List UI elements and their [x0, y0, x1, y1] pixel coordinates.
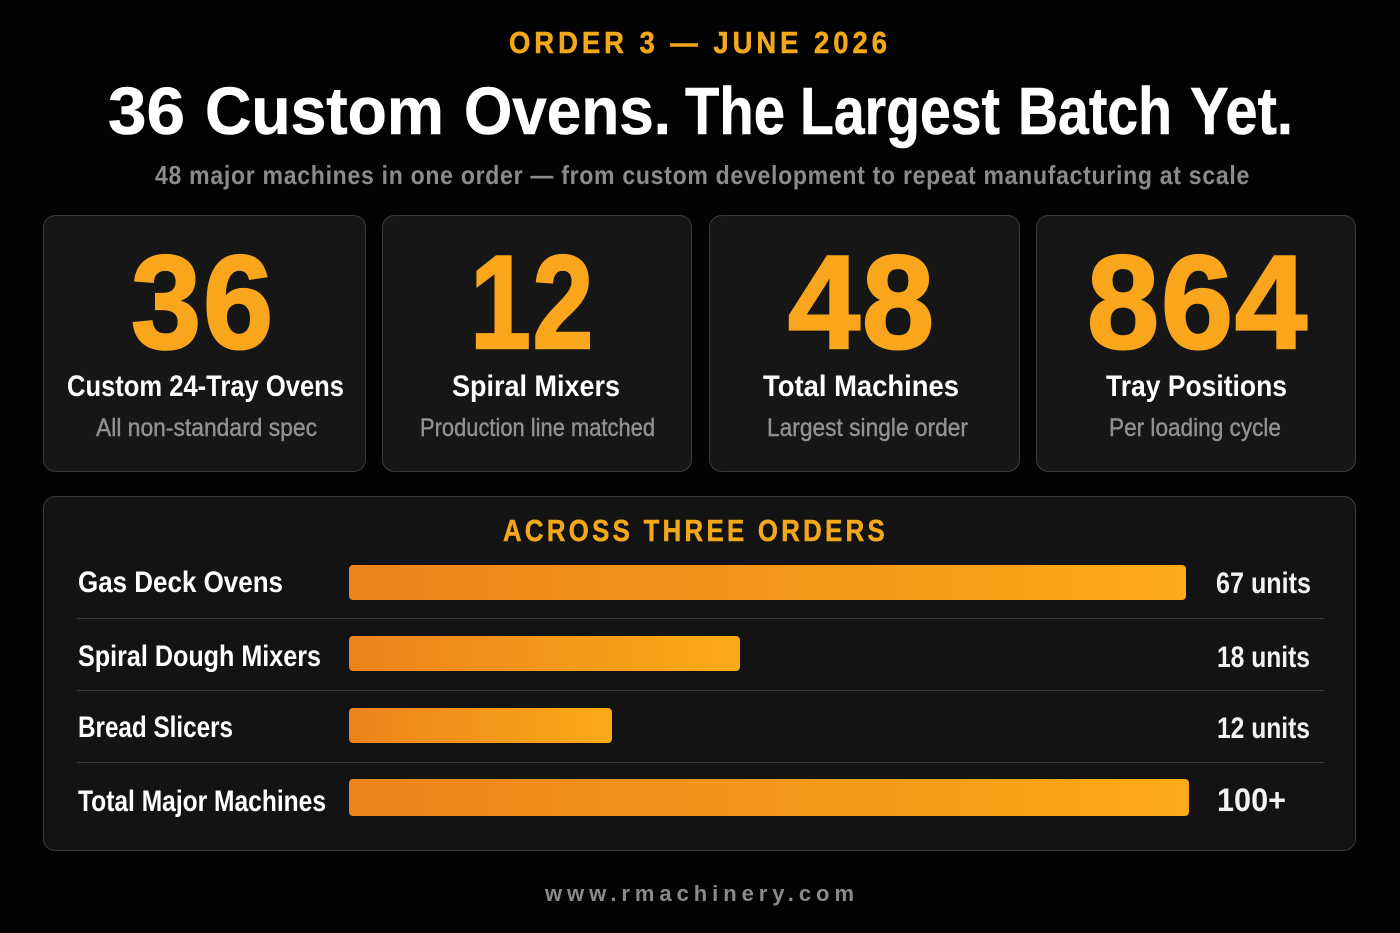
stat note: custom ovens: All non-standard spec	[96, 414, 317, 442]
subtitle: 48 major machines in one order — from custom development to repeat manufacturing at scale	[155, 160, 1250, 190]
panel: tray positions stat	[1036, 216, 1356, 472]
title	[108, 74, 1293, 149]
stat label: tray positions: Tray Positions	[1106, 370, 1287, 403]
chart heading: ACROSS THREE ORDERS	[503, 513, 888, 548]
row: gas deck ovens: Gas Deck Ovens	[78, 566, 283, 599]
row: total major machines	[78, 779, 1286, 818]
row: bread slicers: Bread Slicers	[78, 711, 233, 744]
title: The	[685, 74, 785, 149]
title: Batch	[1018, 74, 1172, 149]
stat number: 36: 36	[131, 229, 275, 377]
title: Yet.	[1190, 74, 1293, 149]
eyebrow: order date: ORDER 3 — JUNE 2026	[509, 25, 891, 60]
stat label: spiral mixers: Spiral Mixers	[452, 370, 620, 403]
stat note: spiral mixers: Production line matched	[420, 414, 655, 442]
footer: website: www.rmachinery.com	[544, 881, 854, 906]
title: 36	[108, 74, 185, 149]
stat number: 48: 48	[788, 229, 936, 377]
stat note: total machines: Largest single order	[767, 414, 968, 442]
title: Ovens.	[464, 74, 671, 149]
row: total major machines: 100+	[1217, 782, 1286, 818]
title: Custom	[205, 74, 444, 149]
row: spiral dough mixers	[78, 636, 1310, 674]
title: Largest	[800, 74, 1000, 149]
panel: total machines stat	[710, 216, 1020, 472]
row: gas deck ovens: 67 units	[1216, 567, 1311, 600]
row: bread slicers	[78, 708, 1310, 745]
panel: spiral mixers stat	[382, 216, 692, 472]
row: spiral dough mixers: 18 units	[1217, 641, 1310, 674]
stat note: tray positions: Per loading cycle	[1109, 414, 1281, 442]
stat number: 864: 864	[1087, 229, 1309, 377]
row: gas deck ovens	[78, 565, 1311, 600]
row: total major machines: Total Major Machines	[78, 785, 326, 818]
stat label: custom ovens: Custom 24-Tray Ovens	[67, 370, 344, 403]
stat label: total machines: Total Machines	[763, 370, 959, 403]
stat number: 12: 12	[470, 229, 595, 377]
row: bread slicers: 12 units	[1217, 712, 1310, 745]
panel: custom ovens stat	[44, 216, 366, 472]
panel: across three orders	[44, 496, 1356, 850]
row: spiral dough mixers: Spiral Dough Mixers	[78, 640, 321, 673]
